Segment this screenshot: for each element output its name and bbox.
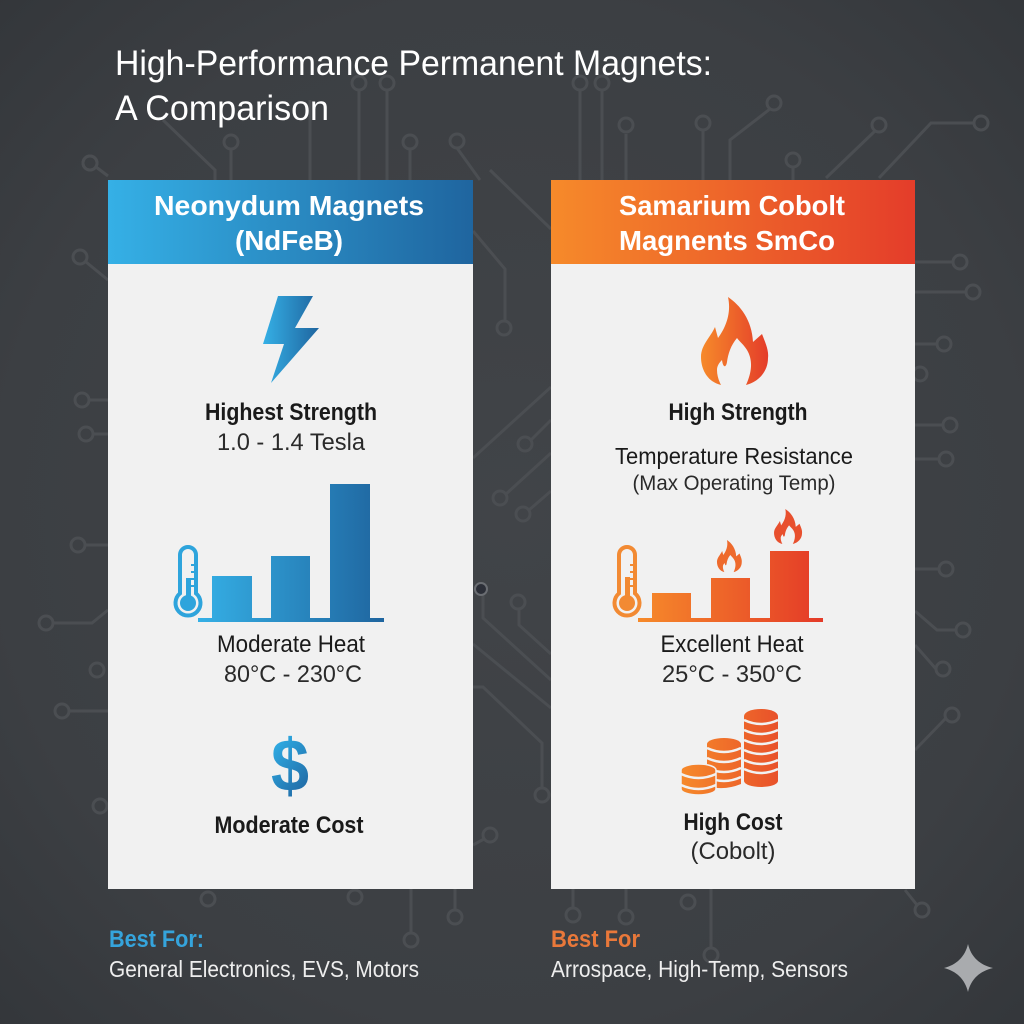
title: A Comparison bbox=[115, 89, 329, 128]
heat text bbox=[217, 631, 365, 688]
temperature text: Temperature Resistance bbox=[615, 443, 853, 469]
panel header: Samarium Cobolt bbox=[619, 190, 845, 221]
panel header: (NdFeB) bbox=[235, 225, 343, 256]
cost text bbox=[684, 809, 782, 865]
temperature text: (Max Operating Temp) bbox=[632, 472, 836, 495]
panel header: Neonydum Magnets bbox=[154, 190, 424, 221]
best for: neodymium bbox=[109, 926, 419, 982]
panel header: Magnents SmCo bbox=[619, 225, 835, 256]
strength text: Highest Strength bbox=[205, 399, 377, 426]
heat text: 80°C - 230°C bbox=[224, 661, 362, 688]
best for: samarium cobalt: Best For bbox=[551, 926, 640, 953]
panel background bbox=[108, 180, 473, 889]
best for: neodymium: Best For: bbox=[109, 926, 204, 953]
cost text: Moderate Cost bbox=[214, 812, 364, 839]
panel: samarium cobalt bbox=[551, 180, 915, 889]
heat text: Excellent Heat bbox=[660, 631, 804, 658]
icon: sparkle bbox=[944, 944, 993, 992]
panel: neodymium bbox=[108, 180, 473, 889]
strength text bbox=[205, 399, 377, 456]
best for: neodymium: General Electronics, EVS, Motors bbox=[109, 956, 419, 982]
strength text: 1.0 - 1.4 Tesla bbox=[217, 429, 366, 456]
icon: thermometer bbox=[615, 547, 640, 616]
heat text bbox=[660, 631, 804, 688]
best for: samarium cobalt bbox=[551, 926, 848, 982]
panel background bbox=[551, 180, 915, 889]
icon: small flame bbox=[717, 540, 742, 572]
cost text: (Cobolt) bbox=[690, 838, 776, 865]
icon: thermometer bbox=[175, 547, 200, 616]
dark node bbox=[475, 583, 487, 595]
cost text: High Cost bbox=[684, 809, 782, 836]
icon: large flame bbox=[774, 509, 802, 544]
best for: samarium cobalt: Arrospace, High-Temp, Sensors bbox=[551, 956, 848, 982]
icon: lightning bolt bbox=[263, 296, 319, 383]
bar chart bbox=[638, 551, 823, 622]
title: High-Performance Permanent Magnets: bbox=[115, 44, 712, 83]
strength text: High Strength bbox=[668, 399, 808, 426]
heat text: 25°C - 350°C bbox=[662, 661, 802, 688]
panel header bbox=[108, 180, 473, 264]
heat text: Moderate Heat bbox=[217, 631, 365, 658]
bar chart bbox=[198, 484, 384, 622]
icon: dollar sign: $ bbox=[271, 724, 309, 807]
icon: coin stacks bbox=[681, 709, 778, 795]
icon: flame bbox=[701, 297, 768, 385]
panel header bbox=[551, 180, 915, 264]
temperature text bbox=[615, 443, 853, 495]
